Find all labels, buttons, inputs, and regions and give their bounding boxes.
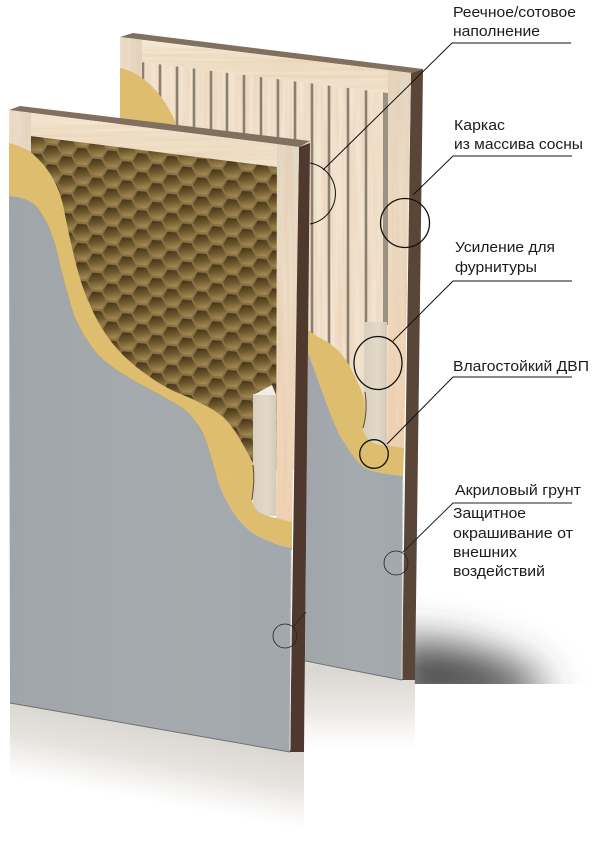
back door top edge	[120, 33, 423, 73]
back door left stile	[120, 37, 142, 130]
label: fibreboard: Влагостойкий ДВП	[453, 359, 589, 375]
back door top rail	[142, 40, 388, 93]
back door bottom line	[305, 661, 402, 680]
label: protective coating	[453, 506, 573, 580]
leader line	[387, 377, 572, 444]
back door side edge	[402, 69, 423, 680]
label: protective coating: воздействий	[453, 564, 545, 580]
honeycomb filling	[31, 136, 277, 490]
front door top rail	[31, 113, 277, 167]
back door DVP sheet upper piece	[120, 68, 176, 124]
marker circle	[273, 624, 297, 648]
label: filling: Реечное/сотовое	[453, 5, 576, 21]
slat grooves	[143, 60, 386, 380]
front door left stile	[9, 110, 31, 165]
marker circle	[360, 440, 388, 468]
front door reinforcement block	[253, 385, 276, 516]
front door bottom line	[10, 703, 290, 752]
callout: slat or honeycomb filling	[310, 43, 571, 224]
callout: front door primer marker	[273, 612, 306, 648]
front door side edge	[290, 143, 310, 752]
label: reinforcement	[455, 240, 555, 276]
front door with honeycomb filling	[9, 106, 310, 752]
callout: moisture resistant fibreboard	[360, 377, 572, 468]
leader line	[413, 156, 572, 195]
back door reinforcement block	[364, 322, 387, 444]
back door gray primer face	[305, 352, 403, 680]
label: protective coating: Защитное	[453, 506, 526, 522]
label: filling: наполнение	[453, 24, 540, 40]
label: reinforcement: Усиление для	[455, 240, 555, 256]
label: protective coating: внешних	[453, 545, 518, 561]
front door top edge	[9, 106, 310, 147]
label: reinforcement: фурнитуры	[455, 260, 537, 276]
slat panel base	[142, 62, 388, 470]
leader line	[403, 503, 572, 552]
front door gray primer face	[9, 196, 292, 752]
callout: hardware reinforcement	[354, 281, 572, 390]
label: frame	[454, 118, 583, 153]
reflection of front door	[10, 704, 304, 816]
callout: pine frame	[380, 156, 572, 248]
label: filling	[453, 5, 576, 40]
marker circle	[384, 551, 408, 575]
front door DVP shadow line	[252, 465, 254, 500]
front door right stile	[276, 144, 299, 530]
front door light edge	[290, 550, 292, 750]
leader line	[293, 612, 306, 627]
floor shadow of back door	[392, 640, 548, 705]
back door with slat filling	[120, 33, 423, 680]
leader line	[323, 43, 571, 170]
reflection of back door	[305, 662, 415, 752]
marker circle	[380, 198, 430, 248]
leader line	[393, 281, 572, 341]
label: frame: из массива сосны	[454, 137, 583, 153]
back door right stile	[388, 70, 411, 450]
back door DVP sheet lower piece	[308, 330, 404, 476]
marker arc	[310, 163, 335, 224]
front door DVP sheet	[9, 143, 292, 548]
label: frame: Каркас	[454, 118, 505, 134]
label: protective coating: окрашивание от	[453, 526, 573, 542]
back door light edge	[402, 478, 403, 679]
label: primer: Акриловый грунт	[455, 483, 581, 499]
back door DVP shadow line	[363, 392, 366, 428]
callout: acrylic primer	[384, 503, 572, 575]
marker ellipse	[354, 336, 402, 390]
